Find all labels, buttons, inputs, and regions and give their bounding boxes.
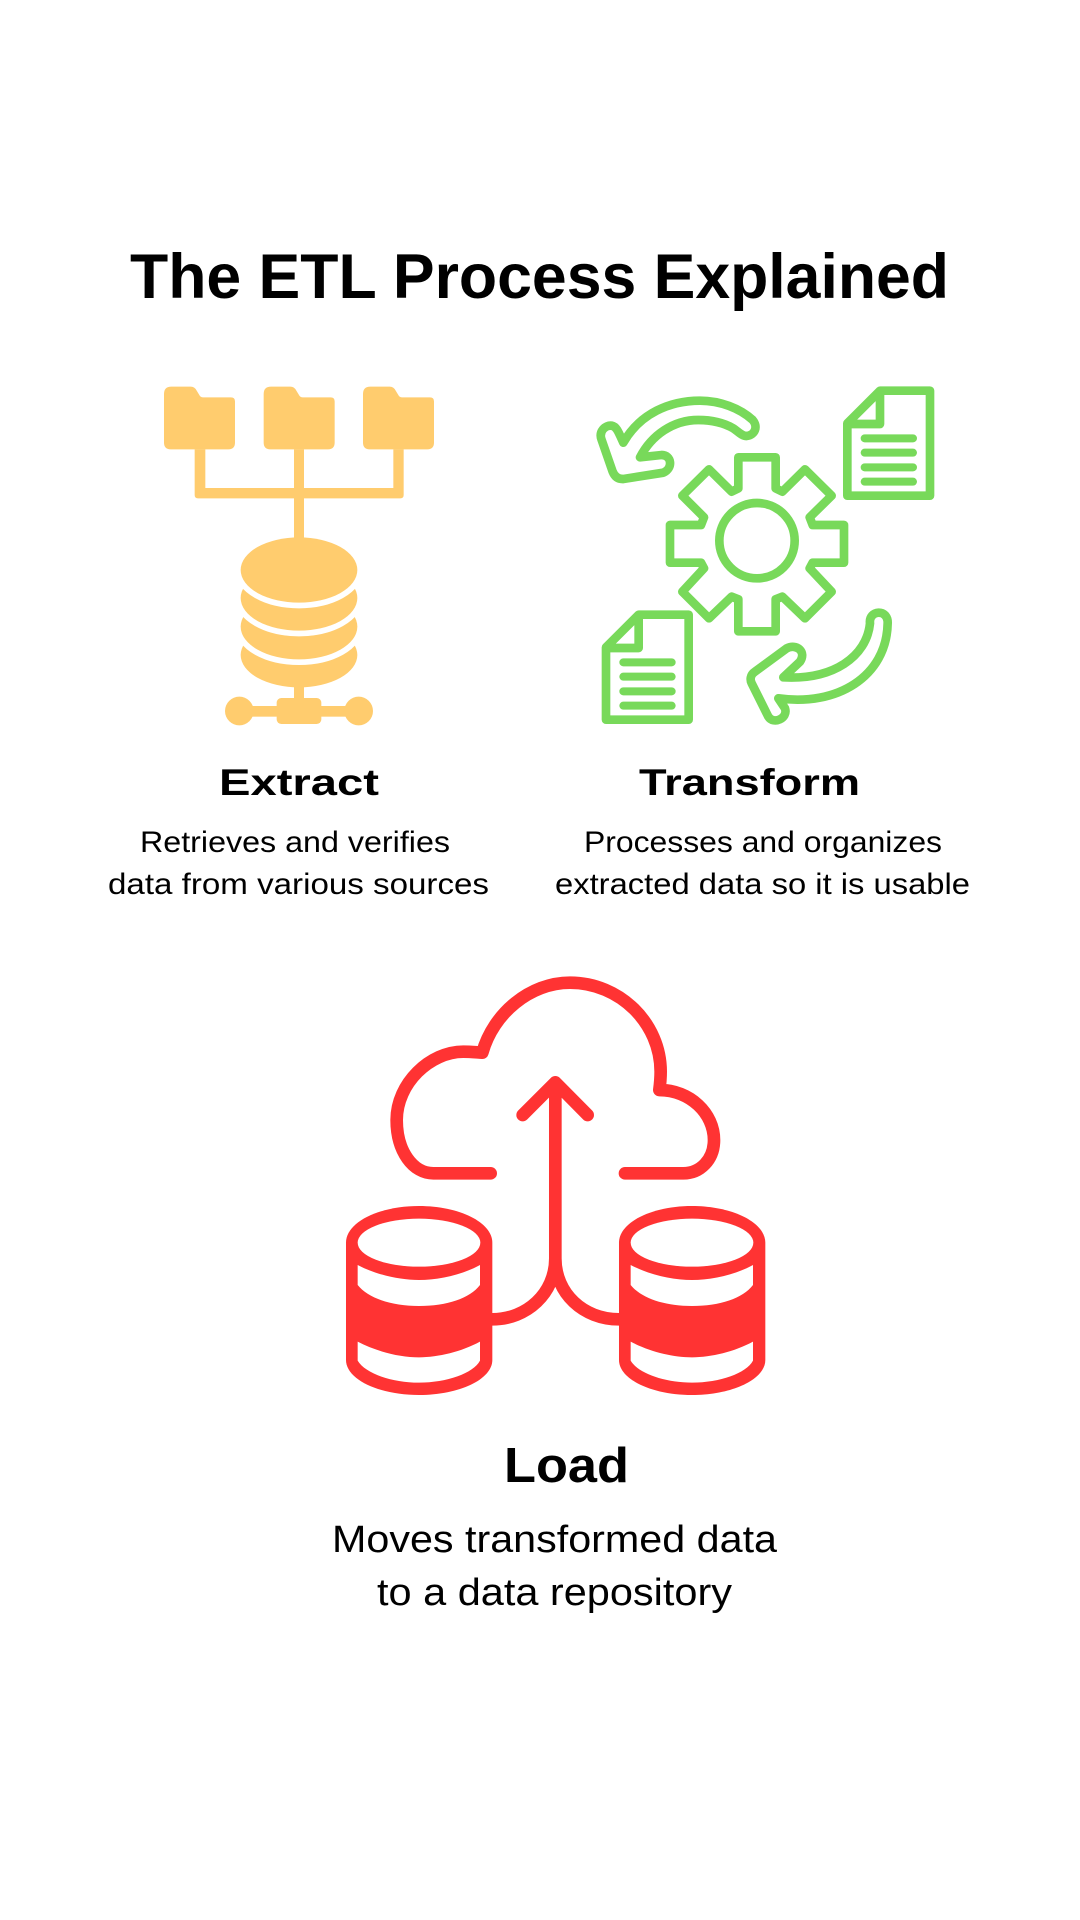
text: load description: Moves transformed data bbox=[332, 1519, 778, 1561]
icon: cloud bbox=[397, 983, 714, 1173]
icon: gear bbox=[670, 457, 844, 631]
icon: database left bbox=[346, 1206, 492, 1395]
heading: Extract: Extract bbox=[219, 762, 379, 803]
text: transform description: Processes and organizes bbox=[584, 826, 942, 859]
icon: folders connected to database bbox=[164, 387, 434, 725]
icon: document top right bbox=[847, 391, 930, 496]
arrow: top left bbox=[601, 401, 755, 479]
heading: Load: Load bbox=[504, 1439, 629, 1493]
text: load description bbox=[332, 1519, 778, 1614]
icon: database right bbox=[619, 1206, 765, 1395]
text: transform description: extracted data so it is usable bbox=[555, 868, 970, 901]
heading: Transform: Transform bbox=[639, 762, 860, 803]
panel: extract bbox=[108, 387, 489, 901]
text: transform description bbox=[555, 826, 970, 901]
text: load description: to a data repository bbox=[377, 1572, 732, 1614]
arrow: upload bbox=[492, 1082, 619, 1319]
title: The ETL Process Explained bbox=[130, 242, 949, 312]
panel: load bbox=[332, 983, 778, 1614]
arrow: bottom right bbox=[751, 613, 888, 720]
panel: transform bbox=[555, 391, 970, 901]
icon: cloud upload with databases bbox=[346, 983, 765, 1395]
icon: document bottom left bbox=[606, 615, 689, 720]
text: extract description: data from various sources bbox=[108, 868, 489, 901]
icon: gear with documents and arrows bbox=[601, 391, 930, 720]
text: extract description: Retrieves and verifies bbox=[140, 826, 450, 859]
text: extract description bbox=[108, 826, 489, 901]
